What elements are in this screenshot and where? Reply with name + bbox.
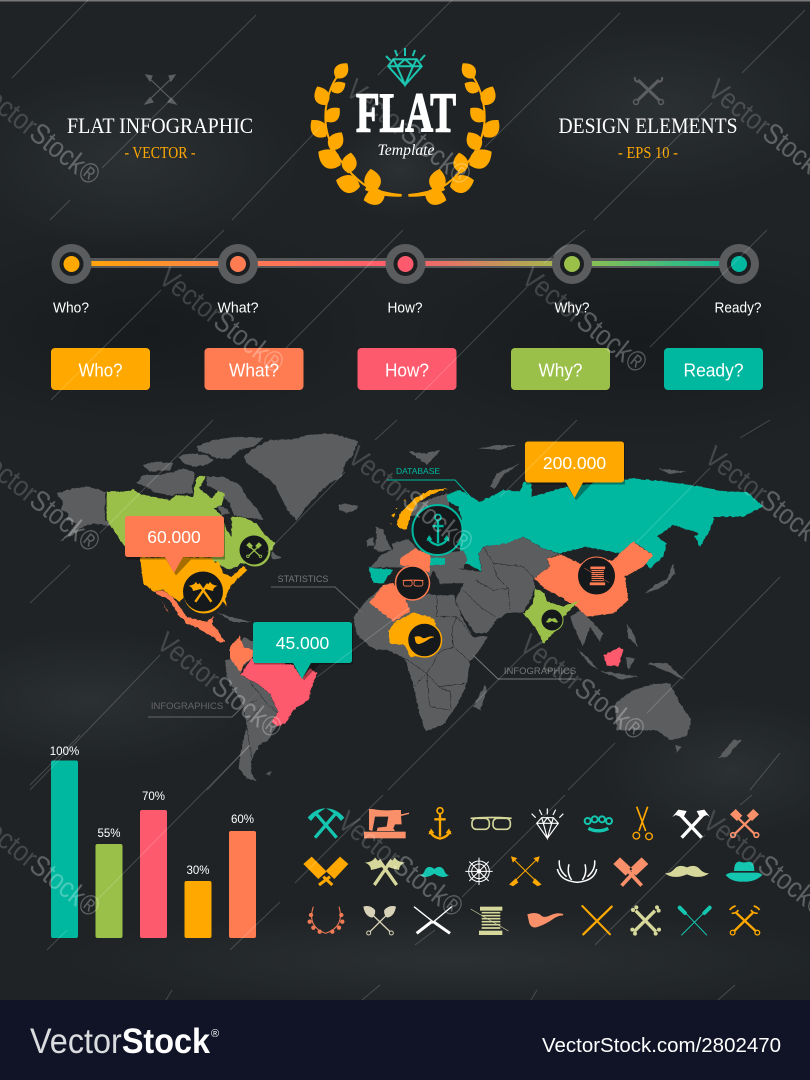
timeline [52, 244, 762, 316]
icon: crossed bones [630, 905, 661, 936]
badge: spool [578, 557, 618, 597]
leader line: infographics right [473, 655, 576, 679]
watermark text [0, 73, 810, 924]
leader line: infographics right: INFOGRAPHICS [504, 666, 576, 677]
callout: 45.000: 45.000 [276, 633, 330, 653]
icon: sewing machine [364, 809, 409, 838]
icon: cleavers [303, 857, 348, 885]
badge: pipe [408, 623, 442, 657]
USA [140, 557, 247, 607]
icon: scissors [633, 807, 652, 840]
Africa [353, 583, 488, 732]
button: Who: Who? [78, 360, 122, 380]
icon: axes [365, 857, 405, 885]
icon: crossed bats [582, 906, 612, 934]
icon: shovels [363, 906, 396, 935]
leader line: statistics [271, 574, 363, 613]
map: Eurasia, Africa, Oceania [353, 445, 763, 758]
step: What [218, 244, 258, 316]
Colombia [230, 636, 253, 673]
Canada [107, 476, 275, 570]
Middle East and Central Asia [433, 537, 562, 633]
watermark text: VectorStock® [516, 261, 653, 380]
icon: laurel [308, 907, 344, 933]
header: left title: FLAT INFOGRAPHIC [67, 113, 253, 138]
footer registered mark: ® [211, 1028, 219, 1040]
South America [225, 637, 278, 782]
bar: 30%: 30% [186, 865, 210, 877]
Brazil [241, 658, 317, 727]
islands [408, 445, 742, 758]
header: left title: - VECTOR - [124, 143, 196, 162]
China [534, 542, 653, 617]
leader line: infographics left [148, 693, 257, 717]
bar: 30% [184, 865, 212, 938]
callout: 60.000: 60.000 [147, 527, 201, 547]
button: What: What? [229, 360, 279, 380]
badge: axes [183, 572, 224, 614]
callout: 200.000 [525, 442, 625, 500]
icon: hat [726, 862, 762, 882]
footer band [0, 1000, 810, 1080]
step: Ready: Ready? [714, 300, 762, 316]
watermark text: VectorStock® [153, 261, 290, 380]
icon: wrenches [730, 906, 760, 935]
Scandinavia [390, 488, 448, 530]
icon: brass knuckles [585, 816, 612, 831]
button: Ready: Ready? [684, 360, 744, 380]
logo: Template script: Template [378, 142, 434, 159]
leader line: database [387, 466, 478, 505]
callout: 200.000: 200.000 [543, 453, 606, 473]
icon: pistons [730, 809, 759, 837]
icon: diamond [532, 808, 563, 838]
bar chart [50, 746, 256, 938]
step: Why: Why? [554, 300, 590, 316]
West Africa [388, 612, 442, 657]
watermark text: VectorStock® [332, 805, 469, 924]
step: How: How? [388, 300, 422, 316]
watermark text: VectorStock® [340, 73, 477, 192]
world map [57, 433, 763, 782]
watermark text: VectorStock® [342, 440, 479, 559]
step: Who: Who? [53, 300, 89, 316]
bar: 100%: 100% [50, 746, 79, 758]
bar: 60% [229, 814, 256, 938]
header: right title: DESIGN ELEMENTS [558, 113, 738, 138]
United Kingdom and Ireland [367, 527, 392, 552]
Mexico and Central America [154, 591, 225, 643]
button: Who [51, 348, 150, 390]
icon: moustache teal [420, 867, 449, 877]
Greenland [217, 433, 358, 775]
header: left title [67, 113, 253, 162]
Borneo [604, 647, 623, 667]
button: Why [511, 348, 610, 390]
icon: anchor [428, 808, 452, 839]
icon: mallets [613, 857, 648, 886]
bar: 100% [50, 746, 79, 938]
icon: faint wrenches [634, 77, 664, 104]
bar: 70%: 70% [142, 791, 165, 803]
icon: ship wheel [465, 858, 493, 885]
logo: FLAT wordmark: FLAT [356, 82, 456, 144]
India [523, 588, 579, 643]
icon: pickaxes [308, 808, 344, 838]
step: Who [52, 244, 92, 316]
Belarus [430, 557, 445, 565]
icon: oars [680, 908, 710, 935]
Nordic interior [410, 493, 450, 517]
Algeria [369, 583, 410, 622]
icon: thread spool [471, 907, 508, 935]
icon: rifles [414, 907, 452, 933]
callout: 45.000 [253, 622, 353, 680]
leader line: database: DATABASE [396, 466, 440, 476]
bar: 60%: 60% [231, 814, 254, 826]
leader line: statistics: STATISTICS [278, 574, 328, 584]
step: What: What? [218, 300, 258, 316]
icon: faint arrows [145, 75, 176, 104]
map: Americas [107, 433, 358, 782]
callout: 60.000 [125, 516, 225, 576]
bar: 55% [96, 828, 122, 938]
button: How: How? [385, 360, 429, 380]
button: Ready [664, 348, 763, 390]
icon: glasses [471, 817, 512, 829]
bar: 55%: 55% [97, 828, 121, 840]
header: right title: - EPS 10 - [618, 143, 678, 162]
icon: hammers [672, 810, 710, 838]
footer id: VectorStock.com/2802470 [542, 1035, 781, 1057]
step: Why [552, 244, 592, 316]
icon: teal diamond [386, 48, 425, 85]
icon: moustache khaki [665, 866, 709, 877]
watermark text: VectorStock® [514, 628, 651, 747]
badge: pistons [240, 536, 270, 566]
icon: arrows [510, 857, 541, 886]
bar: 70% [140, 791, 167, 938]
badge: anchor [412, 505, 462, 555]
map: Europe and North Africa [367, 488, 467, 657]
logo: laurel wreath [305, 59, 505, 208]
Spain [368, 567, 393, 583]
Italy and Balkans [400, 548, 430, 573]
watermark text: VectorStock® [151, 626, 288, 745]
header: right title [558, 113, 738, 162]
icon: pipe [527, 913, 563, 927]
leader line: infographics left: INFOGRAPHICS [151, 701, 223, 712]
Russia [445, 478, 763, 572]
icon: antlers [557, 860, 597, 882]
badge: moustache [541, 609, 563, 631]
button: How [358, 348, 456, 390]
step: How [386, 244, 426, 316]
button: Why: Why? [538, 360, 582, 380]
footer logo: VectorStock [30, 1022, 210, 1061]
badge: glasses [396, 566, 430, 600]
Western Europe [370, 539, 467, 577]
map: Arctic and Alaska [57, 437, 263, 542]
step: Ready [714, 244, 762, 316]
icon set [303, 807, 762, 936]
button: What [204, 348, 304, 390]
